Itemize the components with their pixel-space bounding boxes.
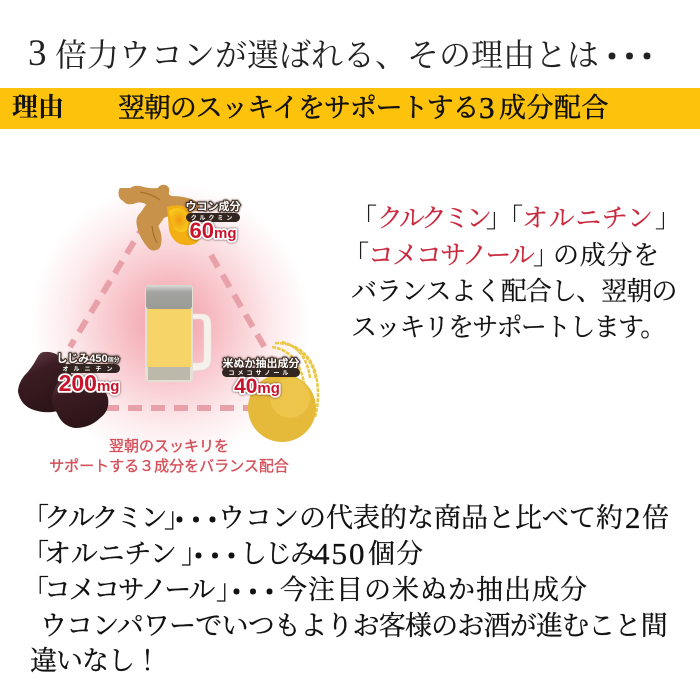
label: shijimi 200mg: オルニチン (62, 365, 118, 373)
bottom line 1: クルクミン (44, 503, 165, 533)
bottom line 3: 」 (216, 575, 243, 605)
bottom line 1: ・・・ (166, 499, 216, 538)
yellow banner (0, 88, 700, 129)
diagram caption: サポートする３成分をバランス配合 (49, 458, 289, 475)
bottom line 3: 今注目の米ぬか抽出成分 (280, 575, 588, 605)
bottom line 2: オルニチン (44, 539, 177, 569)
title (28, 32, 650, 78)
line 3: バランスよく配合し、翌朝の (351, 277, 677, 306)
label: turmeric 60mg (186, 199, 240, 243)
banner heading: 翌朝のスッキイをサポートする (118, 93, 478, 123)
diagram: three ingredients triangle (18, 184, 320, 475)
bottom line 1 (22, 499, 669, 538)
banner heading: 3 (479, 90, 494, 125)
line 1: オルニチン (522, 204, 654, 233)
bottom line 3 (22, 571, 588, 610)
label: shijimi 200mg: 200mg (59, 370, 119, 396)
bottom line 3: ・・・ (223, 571, 272, 610)
line 2: 」 (533, 241, 559, 270)
bottom line 2: 450 (314, 536, 366, 571)
label: shijimi 200mg (56, 352, 120, 396)
bottom text block (22, 499, 669, 676)
title: 3 (28, 33, 46, 74)
line 1: 「 (497, 204, 523, 233)
label: turmeric 60mg: 60mg (190, 218, 236, 243)
label: rice bran 40mg (222, 356, 300, 398)
line 4: スッキリをサポートします。 (351, 313, 665, 342)
line 2 (343, 241, 660, 270)
label: rice bran 40mg: コメコサノール (229, 370, 291, 377)
bottom line 2: 」 (181, 539, 208, 569)
line 1: 「 (351, 204, 377, 233)
bottom line 2: しじみ (240, 539, 315, 569)
line 1: クルクミン (377, 204, 489, 233)
bottom line 5: 違いなし！ (30, 646, 160, 676)
bottom line 1: 「 (22, 503, 49, 533)
diagram caption (49, 438, 289, 475)
bottom line 3: 「 (22, 575, 49, 605)
bottom line 3: コメコサノール (44, 575, 213, 605)
icon: rice bran and rice ear (248, 342, 318, 442)
line 2: 「 (343, 241, 369, 270)
bottom line 1: 2 (625, 500, 640, 535)
icon: shijimi clams (18, 352, 108, 428)
bottom line 1: ウコンの代表的な商品と比べて約 (218, 503, 623, 533)
label: turmeric 60mg: クルクミン (191, 214, 235, 222)
label: turmeric 60mg: ウコン成分 (186, 199, 240, 213)
label: rice bran 40mg: 米ぬか抽出成分 (222, 356, 300, 370)
title: ・・・ (596, 32, 649, 78)
dashed triangle (70, 222, 265, 408)
icon: beer mug (145, 285, 211, 382)
bottom line 2: ・・・ (185, 535, 234, 574)
title: 倍力ウコンが選ばれる、その理由とは (55, 37, 599, 73)
line 2: の成分を (553, 241, 660, 270)
banner heading: 成分配合 (499, 93, 609, 123)
icon: turmeric root (120, 187, 200, 248)
bottom line 1: 」 (164, 503, 191, 533)
label: rice bran 40mg: 40mg (234, 375, 280, 398)
line 2: コメコサノール (368, 241, 533, 270)
bottom line 4: ウコンパワーでいつもよりお客様のお酒が進むこと間 (40, 611, 667, 641)
line 1: 」 (486, 204, 512, 233)
banner heading (118, 90, 609, 125)
line 1: 」 (655, 204, 681, 233)
right explanation text (343, 204, 681, 342)
line 1 (351, 204, 681, 233)
diagram caption: 翌朝のスッキリを (109, 438, 229, 455)
bottom line 2 (22, 535, 424, 574)
label: shijimi 200mg: しじみ450個分 (56, 352, 120, 365)
pink glow (30, 182, 310, 462)
bottom line 1: 倍 (642, 503, 669, 533)
banner label: 理由 (12, 93, 64, 122)
bottom line 2: 個分 (368, 539, 424, 569)
bottom line 2: 「 (22, 539, 49, 569)
